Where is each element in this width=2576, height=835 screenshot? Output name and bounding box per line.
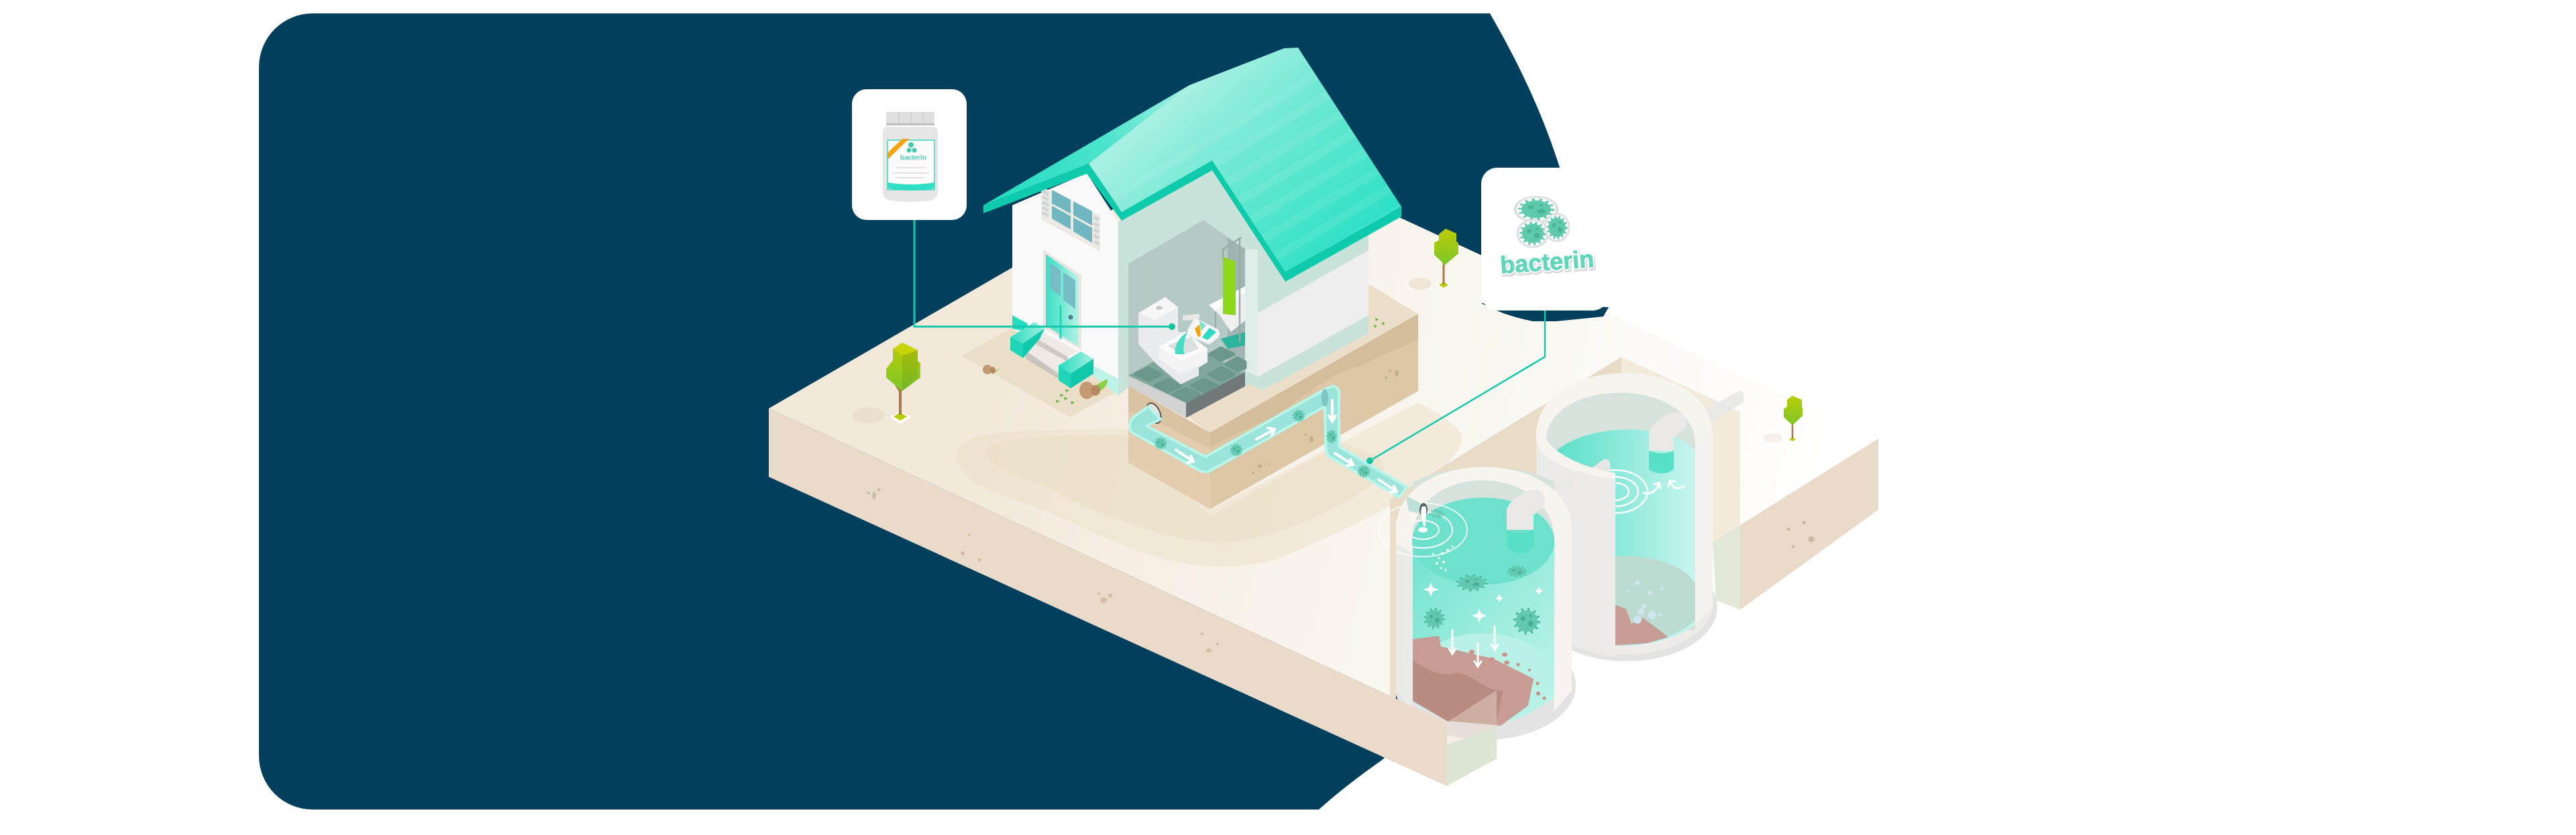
- inlet spout: [1406, 496, 1428, 526]
- roof stripes: [1136, 72, 1401, 260]
- bottle lid: [886, 112, 934, 125]
- cutaway mint wall section: [1118, 170, 1265, 396]
- rear tank water: [1556, 429, 1695, 646]
- septic tank rear: [1536, 373, 1744, 661]
- elbow outlet pipe: [1507, 490, 1545, 553]
- sewage pipe: [1130, 386, 1428, 526]
- pipe corner shading: [1322, 389, 1328, 406]
- front white wall: [1012, 173, 1118, 387]
- front tank water surface: [1412, 498, 1554, 585]
- sparkles: [1424, 582, 1543, 622]
- sand dune shadows: [956, 402, 1462, 567]
- house: [983, 48, 1401, 418]
- tree right: [1764, 396, 1803, 443]
- floating bacteria: [1426, 510, 1538, 632]
- pipe flow arrows: [1176, 400, 1397, 492]
- toilet bowl: [1159, 332, 1208, 374]
- front tank back wall: [1413, 468, 1554, 557]
- soil specks right: [1787, 520, 1814, 549]
- bacterin logo card: [1481, 168, 1609, 311]
- rear tank base: [1536, 553, 1717, 661]
- door: [1043, 249, 1081, 350]
- pipe wall opening: [1144, 401, 1164, 425]
- planter left: [1010, 315, 1044, 358]
- foundation darker soil band: [1210, 314, 1418, 448]
- tipped product bottle: [1187, 318, 1220, 343]
- rear tank ripples: [1583, 470, 1648, 513]
- foam droplets: [1432, 546, 1453, 571]
- porch ground patch: [961, 329, 1122, 417]
- leader line from product card to toilet: [914, 220, 1175, 330]
- roof main slope: [1089, 48, 1401, 272]
- navy sliver under bacterin card: [1481, 303, 1609, 321]
- product bottle card: [852, 89, 967, 220]
- foundation left face: [1128, 386, 1210, 509]
- right wall upper mint band: [1245, 191, 1368, 313]
- tree middle: [1409, 229, 1458, 290]
- interior back walls: [1128, 220, 1245, 376]
- bacterin logo text: bacterin: [1500, 246, 1595, 280]
- rear tank sediment zone: [1615, 556, 1695, 645]
- sludge: [1413, 636, 1546, 726]
- rear tank sludge: [1615, 605, 1668, 645]
- entrance steps: [1026, 333, 1078, 379]
- rocks and grass: [983, 318, 1385, 404]
- front tank floor: [1440, 633, 1540, 724]
- toilet: [1138, 297, 1208, 384]
- bathroom floor slab: [1128, 342, 1245, 418]
- soil specks foundation: [1252, 370, 1399, 474]
- platform front corner overlapping the tank: [1382, 510, 1497, 786]
- right wall base mint band: [1245, 315, 1368, 390]
- bottle label: bacterin: [900, 154, 926, 162]
- tree left: [853, 343, 920, 424]
- rear tank inside back wall: [1546, 390, 1703, 482]
- front tank left wall: [1396, 520, 1413, 711]
- foundation top surface: [1128, 284, 1418, 433]
- platform top surface: [769, 140, 1878, 722]
- window: [1041, 186, 1100, 252]
- platform soil specks: [867, 488, 1219, 653]
- shower curtain: [1223, 257, 1236, 315]
- left wall of pit: [1390, 510, 1396, 699]
- bacterin logo text: bacterin: [1499, 245, 1595, 279]
- planter right: [1059, 351, 1093, 388]
- front tank base: [1395, 631, 1576, 740]
- front tank ripples: [1379, 503, 1467, 557]
- leader line from bacterin card to pipe: [1366, 309, 1545, 464]
- floor tiles: [1136, 348, 1245, 400]
- settling arrows: [1449, 626, 1498, 667]
- toilet tank: [1138, 297, 1178, 355]
- bacteria cluster logo: [1515, 197, 1569, 247]
- platform front face: [769, 408, 1447, 786]
- wall base mint strip: [1093, 366, 1118, 396]
- rear tank swirl arrows: [1644, 481, 1684, 494]
- isometric ground platform: [769, 140, 1878, 786]
- foundation right face: [1210, 314, 1418, 509]
- front tank rim: [1396, 467, 1572, 553]
- rear tank rim: [1536, 373, 1713, 480]
- roof dark edge: [983, 160, 1401, 282]
- rear tank inner connector pipe: [1590, 459, 1610, 476]
- front tank water column: [1413, 541, 1554, 718]
- pit around septic tanks: [1390, 357, 1740, 691]
- septic tank front: [1379, 467, 1576, 740]
- bacterin logo text: bacterin: [1499, 245, 1595, 279]
- house foundation block: [1128, 284, 1418, 509]
- pit back-right wall: [1621, 357, 1740, 543]
- front tank right wall: [1554, 520, 1572, 711]
- navy background panel: [259, 13, 1570, 810]
- rear tank right strip: [1695, 429, 1713, 624]
- bottle body: [883, 127, 938, 202]
- rear tank cut wall: [1536, 429, 1615, 657]
- roof left slope: [983, 85, 1201, 205]
- rear tank outlet pipe: [1705, 391, 1744, 423]
- connector pipe between tanks: [1554, 475, 1574, 498]
- bathtub: [1209, 237, 1245, 349]
- pit back-left wall: [1390, 357, 1621, 691]
- pipe bacteria: [1155, 410, 1369, 477]
- rear tank body: [1536, 429, 1713, 655]
- bottle label: [888, 139, 934, 190]
- rear tank bubbles: [1626, 581, 1664, 624]
- toilet silhouette: [1138, 297, 1208, 384]
- right side platform face: [1713, 439, 1878, 610]
- towel rail: [1183, 314, 1199, 321]
- rear tank elbow pipe: [1649, 412, 1686, 451]
- right side wall: [1258, 250, 1368, 377]
- mint inner jamb: [1245, 249, 1258, 377]
- poured liquid: [1175, 332, 1187, 354]
- shower rail: [1223, 237, 1241, 342]
- pipe body: [1130, 386, 1407, 497]
